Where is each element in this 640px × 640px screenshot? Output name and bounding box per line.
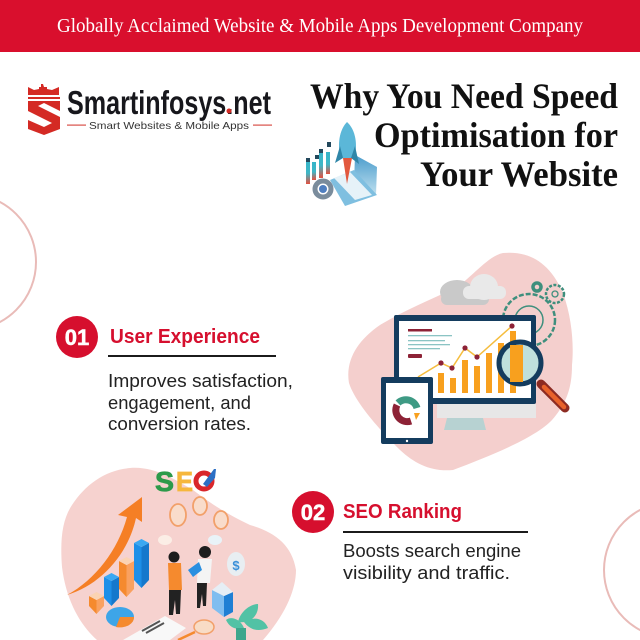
icon: shield logo [28,84,60,135]
bar chart 3d [89,539,149,614]
icon: clouds [440,274,506,305]
monitor [394,315,536,430]
plant [226,604,268,640]
icon: magnifying glass [499,342,565,408]
small magnifier [178,620,214,640]
text: seo ranking body: visibility and traffic. [343,563,510,583]
tablet [381,377,433,444]
pie chart [106,607,134,627]
people [168,546,212,615]
number badge 01: 01 [65,325,89,350]
title: Optimisation for [374,115,618,155]
decorative circle right [604,502,640,638]
icon: gears [503,283,564,346]
icon: rocket and laptop [306,122,377,206]
seo logo [155,466,216,497]
number badge 02: 02 [301,500,325,525]
heading: seo ranking: SEO Ranking [343,501,462,523]
speech bubbles [158,535,245,576]
section 02: seo ranking [292,491,528,583]
bar chart [438,331,516,393]
text: seo ranking body [343,541,521,583]
icon: gear [315,181,331,197]
growth arrow [67,497,142,595]
company logo: Smart Websites & Mobile Apps [89,120,249,132]
header banner [0,0,640,52]
text: user experience body: Improves satisfaction, [108,371,293,391]
document [123,616,186,640]
donut chart [396,400,420,422]
text: seo ranking body: Boosts search engine [343,541,521,561]
line chart [418,323,515,377]
number badge 01 [56,316,98,358]
blob illustration: seo [61,466,296,640]
header banner: Globally Acclaimed Website & Mobile Apps Development Company [57,15,583,37]
title: Why You Need Speed [310,76,618,116]
speech bubbles: $ [232,558,240,573]
number badge 02 [292,491,334,533]
section 01: user experience [56,316,293,434]
heading: user experience: User Experience [110,326,260,348]
blob illustration: analytics [348,253,573,470]
clocks [170,497,228,529]
seo logo: S [155,466,174,497]
text: user experience body: engagement, and [108,393,251,413]
text: user experience body [108,371,293,434]
seo logo: E [176,466,193,497]
books [212,582,233,617]
company logo [28,84,272,135]
title [310,76,618,194]
decorative circle left [0,194,36,330]
title: Your Website [420,154,618,194]
company logo: Smartinfosys.net [67,84,271,121]
text: user experience body: conversion rates. [108,414,251,434]
